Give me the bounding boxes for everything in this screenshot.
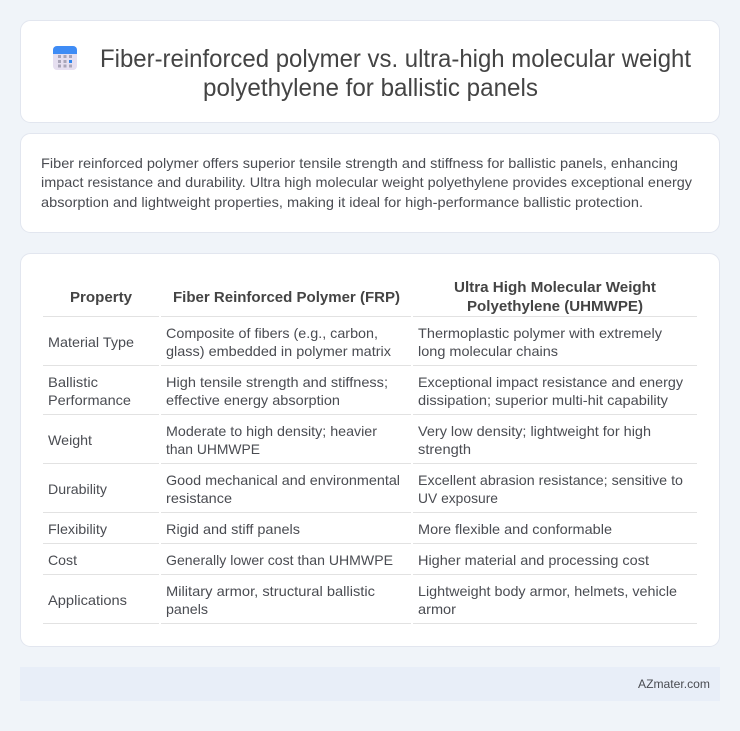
table header: Polyethylene (UHMWPE) bbox=[467, 298, 643, 315]
row: weight: than UHMWPE bbox=[166, 441, 260, 457]
row: material type: Thermoplastic polymer with extremely bbox=[418, 325, 662, 341]
summary text bbox=[41, 155, 692, 210]
row: durability: Good mechanical and environmental bbox=[166, 472, 400, 488]
row: ballistic performance: Exceptional impact resistance and energy bbox=[418, 374, 683, 390]
row: flexibility bbox=[48, 521, 612, 537]
row: ballistic performance: dissipation; superior multi-hit capability bbox=[418, 392, 668, 408]
panel: comparison table bbox=[20, 254, 720, 646]
row: flexibility: Rigid and stiff panels bbox=[166, 521, 300, 537]
row: weight: Weight bbox=[48, 432, 92, 448]
footer credit: AZmater.com bbox=[638, 677, 710, 691]
row: applications bbox=[48, 583, 677, 617]
row: material type: long molecular chains bbox=[418, 343, 558, 359]
row: applications: Lightweight body armor, helmets, vehicle bbox=[418, 583, 677, 599]
title: Fiber-reinforced polymer vs. ultra-high molecular weight bbox=[100, 45, 691, 73]
table header bbox=[70, 279, 656, 315]
row: durability: UV exposure bbox=[418, 490, 498, 506]
row: durability: Durability bbox=[48, 481, 107, 497]
title bbox=[100, 45, 691, 102]
row: flexibility: Flexibility bbox=[48, 521, 107, 537]
row: material type bbox=[48, 325, 662, 359]
summary text: Fiber reinforced polymer offers superior tensile strength and stiffness for ballistic panels, enhancing bbox=[41, 155, 678, 171]
row: ballistic performance: Performance bbox=[48, 392, 131, 408]
summary text: impact resistance and durability. Ultra high molecular weight polyethylene provides exceptional energy bbox=[41, 174, 692, 190]
panel: summary card bbox=[20, 134, 720, 232]
title: polyethylene for ballistic panels bbox=[203, 74, 538, 102]
row: cost: Generally lower cost than UHMWPE bbox=[166, 552, 393, 568]
row: material type: Material Type bbox=[48, 334, 134, 350]
row: durability bbox=[48, 472, 683, 506]
row: weight: Moderate to high density; heavier bbox=[166, 423, 377, 439]
row: cost: Higher material and processing cost bbox=[418, 552, 649, 568]
footer bar bbox=[20, 667, 720, 701]
row: flexibility: More flexible and conformable bbox=[418, 521, 612, 537]
row: cost: Cost bbox=[48, 552, 77, 568]
table header: Property bbox=[70, 289, 133, 306]
row: durability: resistance bbox=[166, 490, 232, 506]
row: ballistic performance: effective energy absorption bbox=[166, 392, 340, 408]
row: applications: panels bbox=[166, 601, 208, 617]
icon: calendar grid bbox=[53, 46, 77, 70]
row: material type: glass) embedded in polymer matrix bbox=[166, 343, 391, 359]
row: weight bbox=[48, 423, 651, 457]
row: ballistic performance: High tensile strength and stiffness; bbox=[166, 374, 388, 390]
panel: title card bbox=[20, 20, 720, 122]
summary text: absorption and lightweight properties, making it ideal for high-performance ballistic protection. bbox=[41, 194, 643, 210]
row: ballistic performance: Ballistic bbox=[48, 374, 98, 390]
row: applications: Military armor, structural ballistic bbox=[166, 583, 375, 599]
table header: Fiber Reinforced Polymer (FRP) bbox=[173, 289, 400, 306]
row: weight: Very low density; lightweight for high bbox=[418, 423, 651, 439]
row: ballistic performance bbox=[48, 374, 683, 408]
table header: Ultra High Molecular Weight bbox=[454, 279, 656, 296]
row: cost bbox=[48, 552, 649, 568]
row: material type: Composite of fibers (e.g., carbon, bbox=[166, 325, 378, 341]
row: applications: Applications bbox=[48, 592, 127, 608]
row: durability: Excellent abrasion resistance; sensitive to bbox=[418, 472, 683, 488]
row: applications: armor bbox=[418, 601, 456, 617]
row: weight: strength bbox=[418, 441, 471, 457]
